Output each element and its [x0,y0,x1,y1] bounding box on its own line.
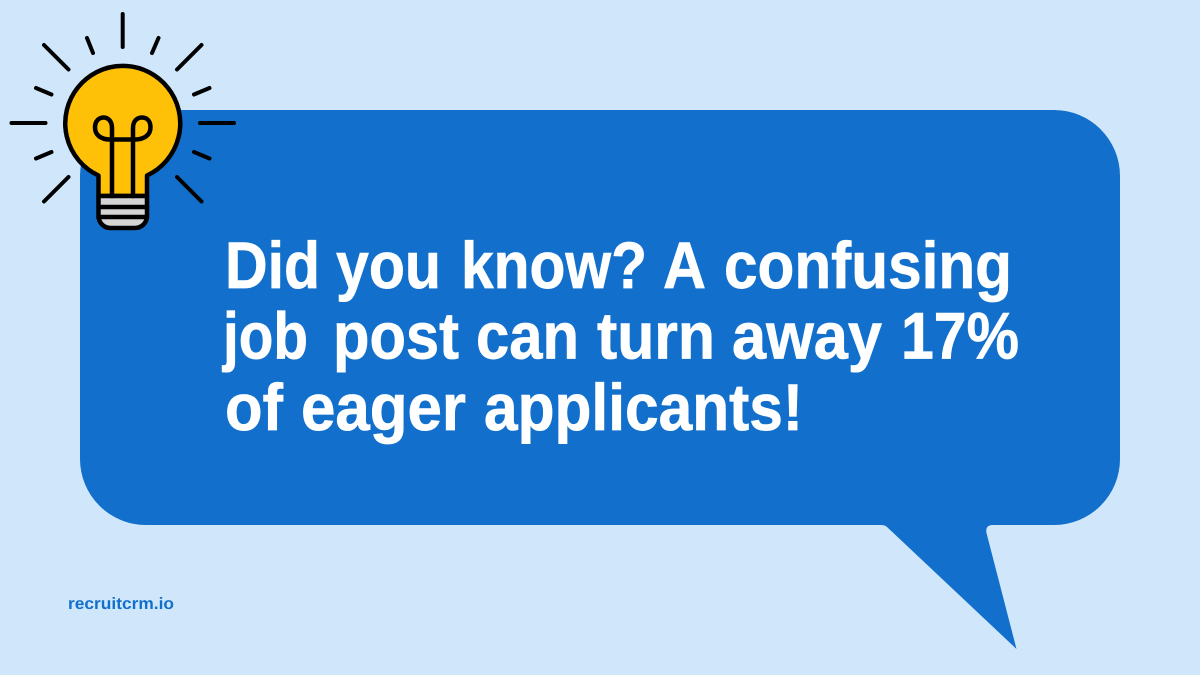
headline text: A [663,228,706,302]
headline text: turn [597,298,715,372]
headline text: of [225,370,284,444]
headline text: job [221,298,308,372]
headline text: post [333,298,459,372]
base threads [98,207,147,217]
icon: light bulb [12,14,234,228]
headline text: away [732,298,882,372]
headline text [221,228,1019,444]
headline text: you [336,228,441,302]
filament [95,118,150,196]
speech bubble panel [80,110,1120,649]
headline text: can [476,298,579,372]
headline text: know? [461,228,647,302]
bulb base [98,196,147,228]
brand url: recruitcrm.io [68,595,174,613]
headline text: eager [301,370,466,444]
bulb glass [65,66,180,196]
headline text: Did [225,228,320,302]
headline text: confusing [724,228,1012,302]
light rays [12,14,234,202]
headline text: 17% [901,298,1019,372]
headline text: applicants! [484,370,803,444]
